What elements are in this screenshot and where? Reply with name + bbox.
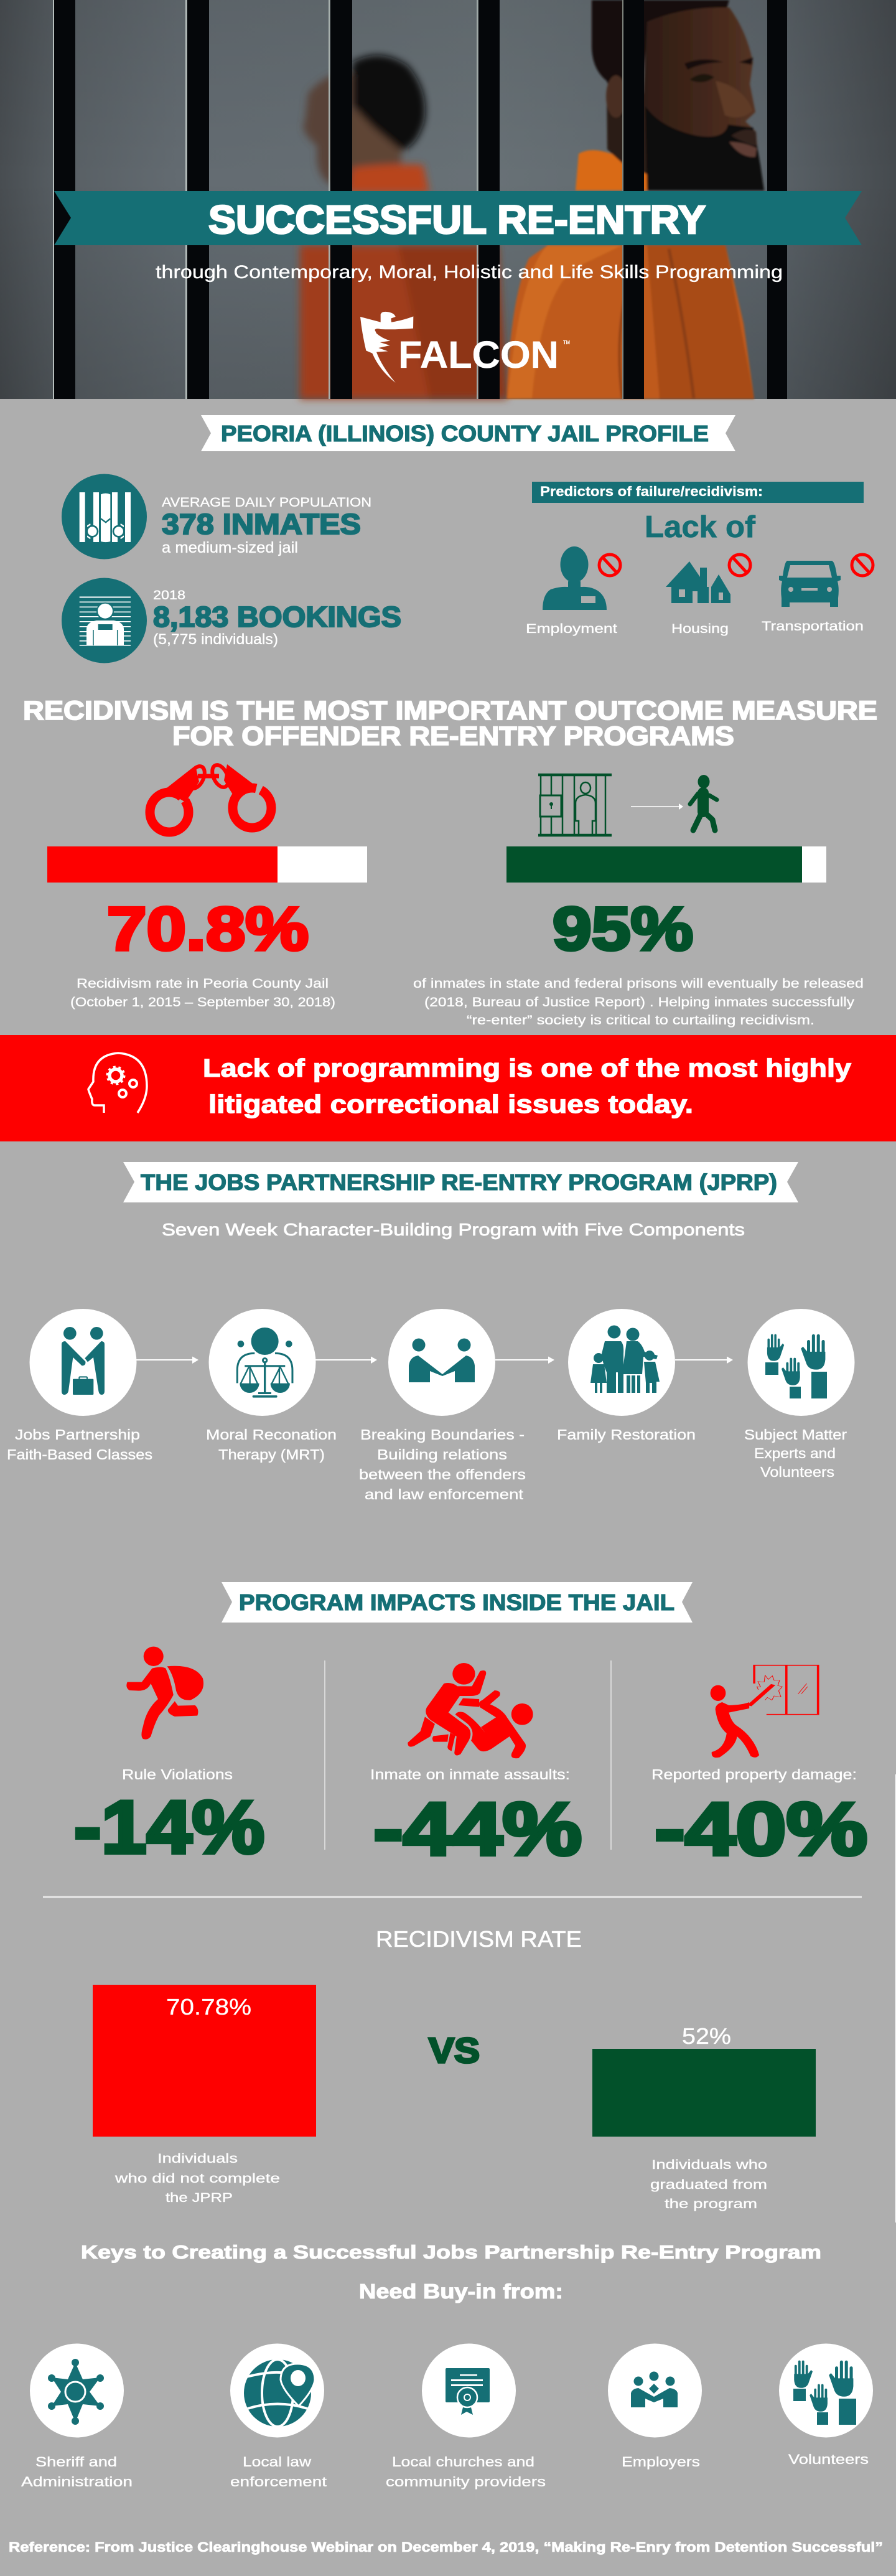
icon: transportation	[762, 555, 873, 634]
icon: walking person	[690, 775, 717, 830]
step 1: jobs partnership: Faith-Based Classes	[7, 1446, 152, 1463]
icon: inmate behind bars	[62, 474, 147, 559]
step 4: family restoration: Family Restoration	[557, 1426, 696, 1443]
falcon logo: TM	[563, 340, 570, 345]
section ribbon: program impacts: PROGRAM IMPACTS INSIDE THE JAIL	[239, 1590, 674, 1615]
stat: 95 percent: 95%	[553, 894, 693, 963]
text: recidivism rate in Peoria	[70, 977, 335, 1009]
text: inmates eventually released: (2018, Bureau of Justice Report) . Helping inmates successfully	[424, 995, 855, 1009]
step 3: breaking boundaries: and law enforcement	[365, 1486, 524, 1502]
subheading: seven week program: Seven Week Character-Building Program with Five Components	[162, 1220, 745, 1239]
bar: graduated: graduated from	[650, 2178, 767, 2192]
title banner: SUCCESSFUL RE-ENTRY	[208, 197, 706, 242]
icon: jail cell	[538, 775, 612, 835]
text: recidivism rate in Peoria: (October 1, 2015 – September 30, 2018)	[70, 995, 335, 1009]
key 3: churches and community providers: community providers	[386, 2474, 546, 2489]
reference footer: Reference: From Justice Clearinghouse Webinar on December 4, 2019, “Making Re-Enry from Detention Successful”	[9, 2539, 883, 2555]
rule violations stat: -14%	[74, 1786, 264, 1869]
text: inmates eventually released	[413, 977, 864, 1028]
inmate assaults stat: Inmate on inmate assaults:	[370, 1766, 570, 1782]
heading: keys to success: Keys to Creating a Successful Jobs Partnership Re-Entry Program	[81, 2241, 821, 2263]
key 5: volunteers	[779, 2344, 873, 2467]
falcon logo: FALCON	[398, 334, 559, 376]
bar: graduated: the program	[665, 2197, 757, 2211]
bar: did not complete: 70.78%	[166, 1994, 251, 2020]
heading: recidivism outcome measure	[23, 696, 877, 751]
step 1: jobs partnership	[7, 1309, 152, 1463]
key 3: churches and community providers: Local churches and	[392, 2454, 534, 2470]
bar: did not complete: Individuals	[157, 2152, 238, 2166]
falcon logo	[360, 312, 570, 383]
prison bars	[53, 0, 787, 399]
key 1: sheriff: Administration	[21, 2474, 133, 2489]
step 4: family restoration	[557, 1309, 696, 1443]
bookings stat: (5,775 individuals)	[153, 631, 278, 648]
text: recidivism rate in Peoria: Recidivism rate in Peoria County Jail	[77, 977, 329, 991]
bar: 70.8 percent	[47, 846, 367, 883]
icon: property damage	[711, 1665, 818, 1758]
arrow	[315, 1357, 377, 1364]
heading: recidivism outcome measure: RECIDIVISM IS THE MOST IMPORTANT OUTCOME MEASURE	[23, 696, 877, 726]
section ribbon: JPRP: THE JOBS PARTNERSHIP RE-ENTRY PROGRAM (JPRP)	[141, 1169, 777, 1195]
icon: transportation: Transportation	[762, 619, 864, 634]
arrow: release	[631, 803, 683, 810]
step 2: moral reconation therapy: Therapy (MRT)	[218, 1446, 325, 1463]
inmate assaults stat: -44%	[373, 1787, 582, 1871]
section ribbon: jail profile	[201, 415, 735, 451]
average daily population stat: 378 INMATES	[162, 508, 361, 540]
inmate assaults stat	[370, 1766, 582, 1871]
step 3: breaking boundaries: Building relations	[377, 1446, 507, 1463]
callout: lack of programming: litigated correctional issues today.	[208, 1090, 693, 1118]
average daily population stat: a medium-sized jail	[162, 539, 298, 556]
icon: running inmate with sack	[126, 1647, 203, 1740]
heading: recidivism rate: RECIDIVISM RATE	[376, 1926, 582, 1952]
key 4: employers	[608, 2344, 702, 2470]
icon: employment: Employment	[526, 622, 617, 636]
icon: handcuffs	[150, 762, 271, 832]
arrow	[136, 1357, 198, 1364]
step 2: moral reconation therapy	[206, 1309, 337, 1463]
property damage stat	[651, 1766, 867, 1871]
bookings stat: 8,183 BOOKINGS	[153, 601, 401, 633]
heading: keys to success	[81, 2241, 821, 2303]
bar: graduated: 52%	[682, 2023, 731, 2049]
step 3: breaking boundaries	[359, 1309, 526, 1502]
callout: lack of programming	[0, 1035, 896, 1141]
vs: VS	[429, 2031, 480, 2071]
icon: mugshot booking	[62, 578, 147, 663]
key 1: sheriff	[21, 2344, 133, 2489]
property damage stat: Reported property damage:	[651, 1766, 857, 1782]
arrow	[495, 1357, 554, 1364]
subtitle: through Contemporary, Moral, Holistic and Life Skills Programming	[156, 262, 783, 283]
icon: housing	[666, 555, 750, 636]
heading: keys to success: Need Buy-in from:	[359, 2280, 563, 2303]
stat: 70.8 percent: 70.8%	[107, 894, 309, 963]
icon: employment	[526, 546, 620, 636]
bookings stat	[153, 588, 401, 648]
step 5: subject matter experts: Experts and	[754, 1445, 836, 1461]
icon: housing: Housing	[671, 622, 729, 636]
key 4: employers: Employers	[622, 2454, 700, 2470]
arrow	[675, 1357, 733, 1364]
bar: graduated	[592, 2023, 816, 2211]
icon: inmate assault	[408, 1663, 533, 1758]
key 3: churches and community providers	[386, 2344, 546, 2489]
step 3: breaking boundaries: between the offenders	[359, 1466, 526, 1482]
average daily population stat: AVERAGE DAILY POPULATION	[162, 495, 371, 510]
step 5: subject matter experts: Subject Matter	[744, 1426, 847, 1443]
heading: recidivism outcome measure: FOR OFFENDER RE-ENTRY PROGRAMS	[172, 721, 734, 751]
panel: predictors of failure: Predictors of failure/recidivism:	[540, 484, 763, 499]
bar: did not complete: who did not complete	[114, 2171, 280, 2186]
step 5: subject matter experts	[744, 1309, 855, 1480]
section ribbon: JPRP	[123, 1162, 798, 1202]
bookings stat: 2018	[153, 588, 185, 602]
step 3: breaking boundaries: Breaking Boundaries -	[360, 1426, 525, 1443]
property damage stat: -40%	[655, 1787, 867, 1871]
bar: 95 percent	[506, 846, 826, 883]
step 1: jobs partnership: Jobs Partnership	[15, 1426, 140, 1443]
text: inmates eventually released: “re-enter” society is critical to curtailing recidivism.	[467, 1013, 814, 1028]
callout: lack of programming: Lack of programming is one of the most highly	[203, 1054, 851, 1082]
key 2: local law enforcement: Local law	[243, 2454, 311, 2470]
rule violations stat: Rule Violations	[122, 1766, 233, 1782]
key 2: local law enforcement: enforcement	[230, 2474, 327, 2489]
panel: predictors of failure	[532, 482, 864, 544]
bar: did not complete	[93, 1985, 316, 2205]
key 1: sheriff: Sheriff and	[35, 2454, 117, 2470]
icon: head with gears	[88, 1053, 147, 1113]
panel: predictors of failure: Lack of	[645, 510, 756, 544]
key 2: local law enforcement	[230, 2344, 327, 2489]
hero photo: inmates behind bars	[0, 0, 896, 399]
step 5: subject matter experts: Volunteers	[760, 1464, 834, 1480]
section ribbon: jail profile: PEORIA (ILLINOIS) COUNTY JAIL PROFILE	[221, 421, 709, 446]
bar: did not complete: the JPRP	[166, 2191, 233, 2205]
average daily population stat	[162, 495, 371, 556]
title banner	[54, 191, 862, 245]
step 2: moral reconation therapy: Moral Reconation	[206, 1426, 337, 1443]
key 5: volunteers: Volunteers	[788, 2452, 869, 2467]
text: inmates eventually released: of inmates in state and federal prisons will eventually be released	[413, 977, 864, 991]
section ribbon: program impacts	[222, 1582, 693, 1623]
bar: graduated: Individuals who	[651, 2158, 767, 2172]
